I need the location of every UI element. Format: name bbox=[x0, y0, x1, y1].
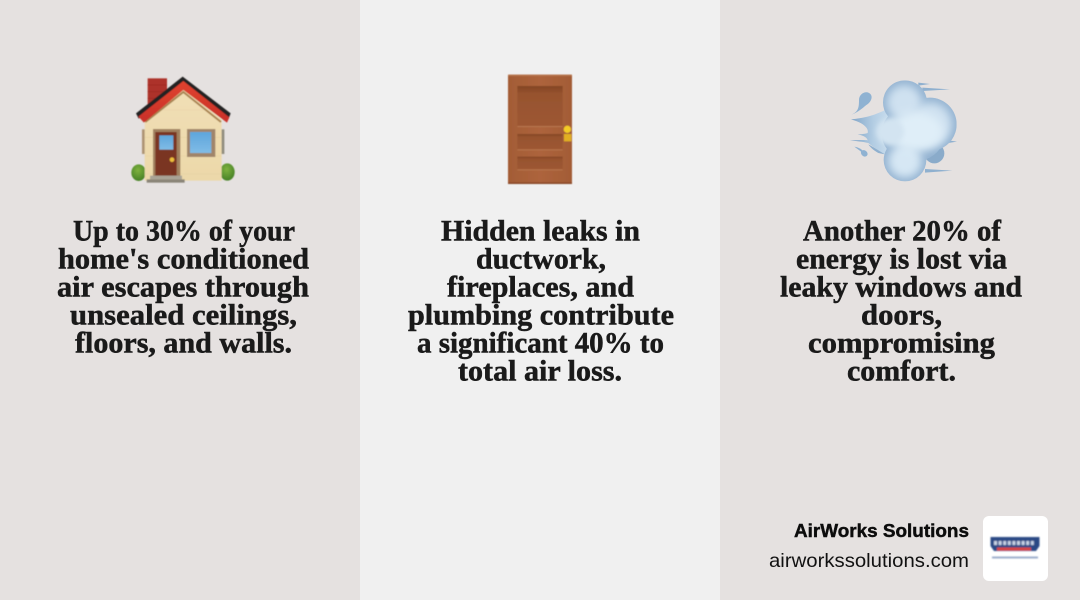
icon: house bbox=[131, 77, 235, 183]
heading: another 20%: doors, bbox=[861, 298, 942, 332]
heading: up to 30% bbox=[57, 214, 309, 360]
heading: hidden leaks: fireplaces, and bbox=[447, 270, 634, 304]
panel: hidden leaks bbox=[360, 0, 720, 600]
brand name: AirWorks Solutions bbox=[794, 520, 969, 541]
heading: hidden leaks: a significant 40% to bbox=[417, 326, 664, 360]
heading: hidden leaks bbox=[408, 214, 674, 388]
heading: another 20%: Another 20% of bbox=[803, 214, 1002, 248]
heading: up to 30%: unsealed ceilings, bbox=[70, 298, 297, 332]
icon: door bbox=[508, 75, 572, 184]
heading: hidden leaks: total air loss. bbox=[458, 354, 622, 388]
heading: another 20%: comfort. bbox=[847, 354, 956, 388]
logo card bbox=[983, 516, 1048, 581]
heading: another 20% bbox=[780, 214, 1022, 388]
panel: conditioned air escaping bbox=[0, 0, 360, 600]
website: airworkssolutions.com bbox=[769, 550, 969, 572]
heading: another 20%: energy is lost via bbox=[796, 242, 1007, 276]
panel: windows and doors bbox=[780, 80, 1022, 381]
heading: up to 30%: home's conditioned bbox=[58, 242, 309, 276]
heading: another 20%: compromising bbox=[808, 326, 995, 360]
heading: up to 30%: Up to 30% of your bbox=[73, 214, 295, 248]
heading: another 20%: leaky windows and bbox=[780, 270, 1022, 304]
icon: wind puff bbox=[850, 80, 957, 182]
heading: hidden leaks: ductwork, bbox=[476, 242, 606, 276]
heading: up to 30%: floors, and walls. bbox=[75, 326, 292, 360]
brand footer bbox=[769, 516, 1048, 581]
heading: hidden leaks: plumbing contribute bbox=[408, 298, 674, 332]
heading: hidden leaks: Hidden leaks in bbox=[441, 214, 640, 248]
heading: up to 30%: air escapes through bbox=[57, 270, 309, 304]
